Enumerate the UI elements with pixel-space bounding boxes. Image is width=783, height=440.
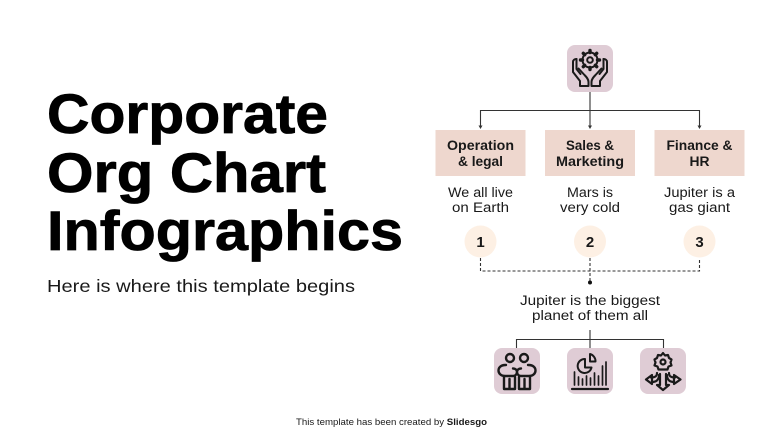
title: Corporate xyxy=(47,82,328,145)
text: Mars is very cold: Mars is xyxy=(567,185,613,200)
title xyxy=(47,82,403,262)
icon: two people xyxy=(494,348,540,394)
panel: Sales & Marketing xyxy=(545,130,635,176)
panel: Sales & Marketing: Marketing xyxy=(556,154,624,169)
number 1 xyxy=(464,226,496,258)
panel: Finance & HR: HR xyxy=(690,154,710,169)
footer credit: This template has been created by Slidesgo xyxy=(296,417,487,428)
dashed connector xyxy=(480,258,700,284)
icon: gear with arrows xyxy=(640,348,686,394)
text: Jupiter is the biggest planet xyxy=(520,293,660,323)
number 3: 3 xyxy=(695,234,704,251)
subtitle: Here is where this template begins xyxy=(47,276,355,296)
icon: hands holding gear xyxy=(567,45,613,92)
number 3 xyxy=(684,226,716,258)
panel: Operation & legal: & legal xyxy=(458,154,503,169)
title: Infographics xyxy=(47,199,403,262)
bottom connector xyxy=(516,330,664,348)
text: Mars is very cold xyxy=(560,185,620,215)
text: Jupiter is a gas giant: Jupiter is a xyxy=(664,185,736,200)
text: We all live on Earth: on Earth xyxy=(452,200,509,215)
text: We all live on Earth: We all live xyxy=(448,185,513,200)
text: Jupiter is a gas giant xyxy=(664,185,736,215)
text: Mars is very cold: very cold xyxy=(560,200,620,215)
number 2: 2 xyxy=(586,234,594,251)
text: Jupiter is the biggest planet: planet of them all xyxy=(532,308,648,323)
panel: Operation & legal xyxy=(436,130,526,176)
top connector arrows xyxy=(478,92,702,129)
panel: Sales & Marketing: Sales & xyxy=(566,138,614,153)
text: Jupiter is a gas giant: gas giant xyxy=(669,200,730,215)
title: Org Chart xyxy=(47,141,326,204)
number 1: 1 xyxy=(476,234,485,251)
text: Jupiter is the biggest planet: Jupiter is the biggest xyxy=(520,293,660,308)
icon: chart with pie xyxy=(567,348,613,394)
number 2 xyxy=(574,226,606,258)
panel: Operation & legal: Operation xyxy=(447,138,514,153)
panel: Finance & HR xyxy=(654,130,744,176)
text: We all live on Earth xyxy=(448,185,513,215)
panel: Finance & HR: Finance & xyxy=(666,138,733,153)
